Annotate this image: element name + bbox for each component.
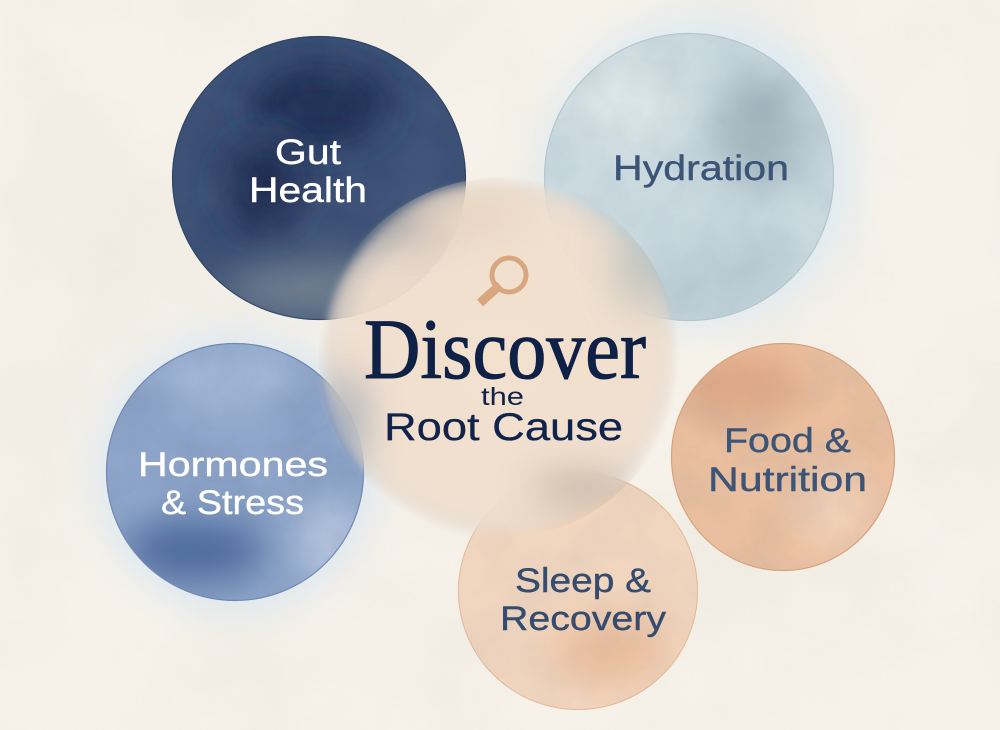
icon: magnifying glass xyxy=(480,258,526,303)
circle: hydration xyxy=(540,30,840,325)
text: the: the xyxy=(481,383,524,411)
label: hydration: Hydration xyxy=(613,149,789,188)
label: food and nutrition: Food & xyxy=(724,422,851,460)
circle: food and nutrition xyxy=(665,340,900,575)
label: hormones and stress: Hormones xyxy=(138,446,328,484)
label: sleep and recovery: Sleep & xyxy=(515,562,651,600)
label: gut health: Gut xyxy=(275,133,341,172)
infographic: discover the root cause xyxy=(86,1,896,710)
circle: gut health xyxy=(170,30,470,325)
heading: discover: Discover xyxy=(364,301,646,397)
text: root cause: Root Cause xyxy=(384,406,623,449)
label: gut health: Health xyxy=(249,171,367,210)
central circle: discover the root cause xyxy=(322,181,676,535)
label: hormones and stress: & Stress xyxy=(161,484,304,522)
circle: sleep and recovery xyxy=(458,475,698,710)
label: food and nutrition: Nutrition xyxy=(708,461,867,499)
circle: hormones and stress xyxy=(100,340,370,605)
label: sleep and recovery: Recovery xyxy=(500,600,666,638)
